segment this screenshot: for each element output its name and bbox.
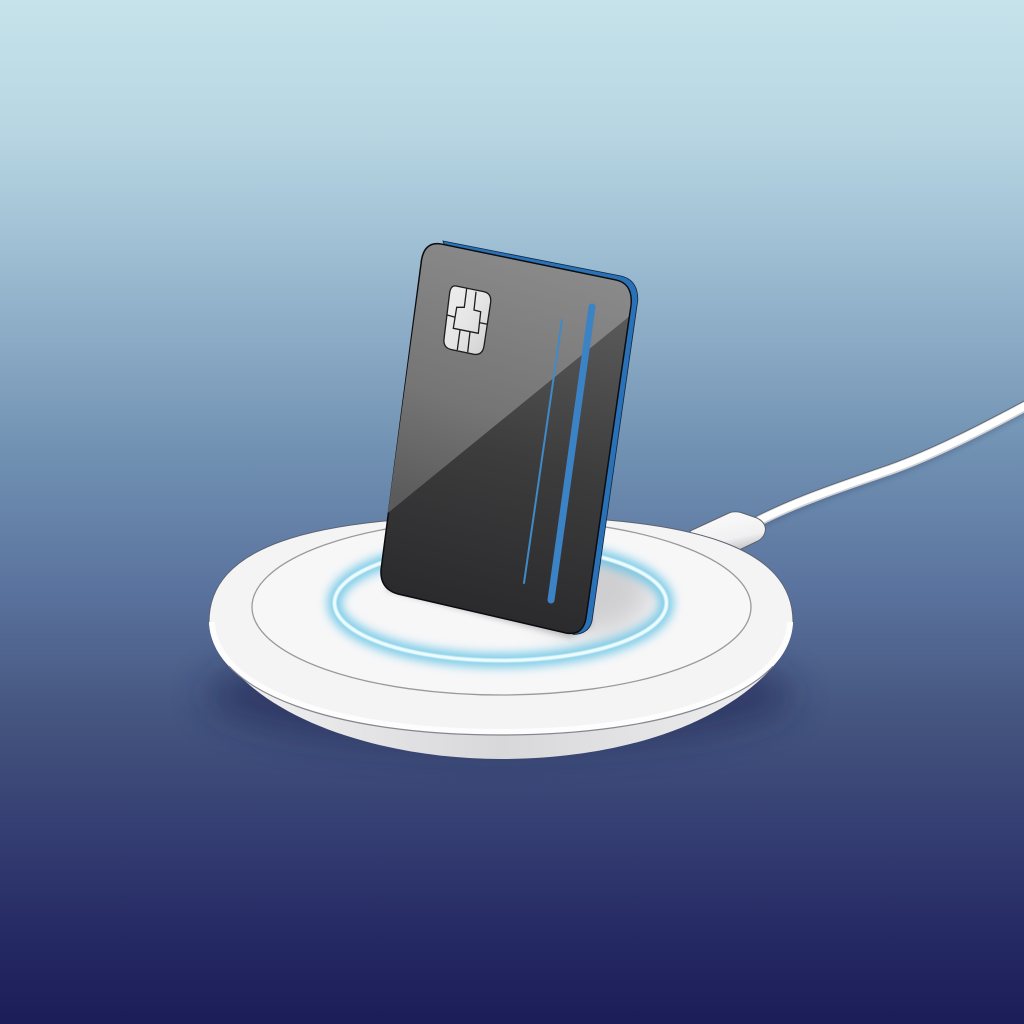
payment card: [381, 241, 638, 634]
disc top edge line: [209, 516, 793, 622]
shadow of card inside ring: [558, 560, 657, 644]
pad base: [236, 672, 768, 759]
glow ring: [334, 546, 666, 660]
card blue edge: [443, 241, 638, 634]
pad inner ring line: [252, 519, 751, 695]
thick blue stripe: [551, 307, 592, 600]
disc bottom edge line: [228, 666, 774, 736]
EMV chip: [444, 286, 491, 354]
card shadow on pad: [385, 575, 592, 638]
pad drop shadow: [205, 643, 795, 747]
card face: [381, 244, 631, 633]
charging cable: [757, 404, 1024, 525]
pad upper disc: [209, 516, 793, 735]
disc bottom highlight: [209, 622, 793, 735]
card sheen: [388, 244, 631, 513]
cable connector: [690, 512, 766, 565]
glow ring core: [334, 546, 666, 660]
thin blue line: [524, 320, 562, 583]
charging pad: [209, 516, 793, 759]
